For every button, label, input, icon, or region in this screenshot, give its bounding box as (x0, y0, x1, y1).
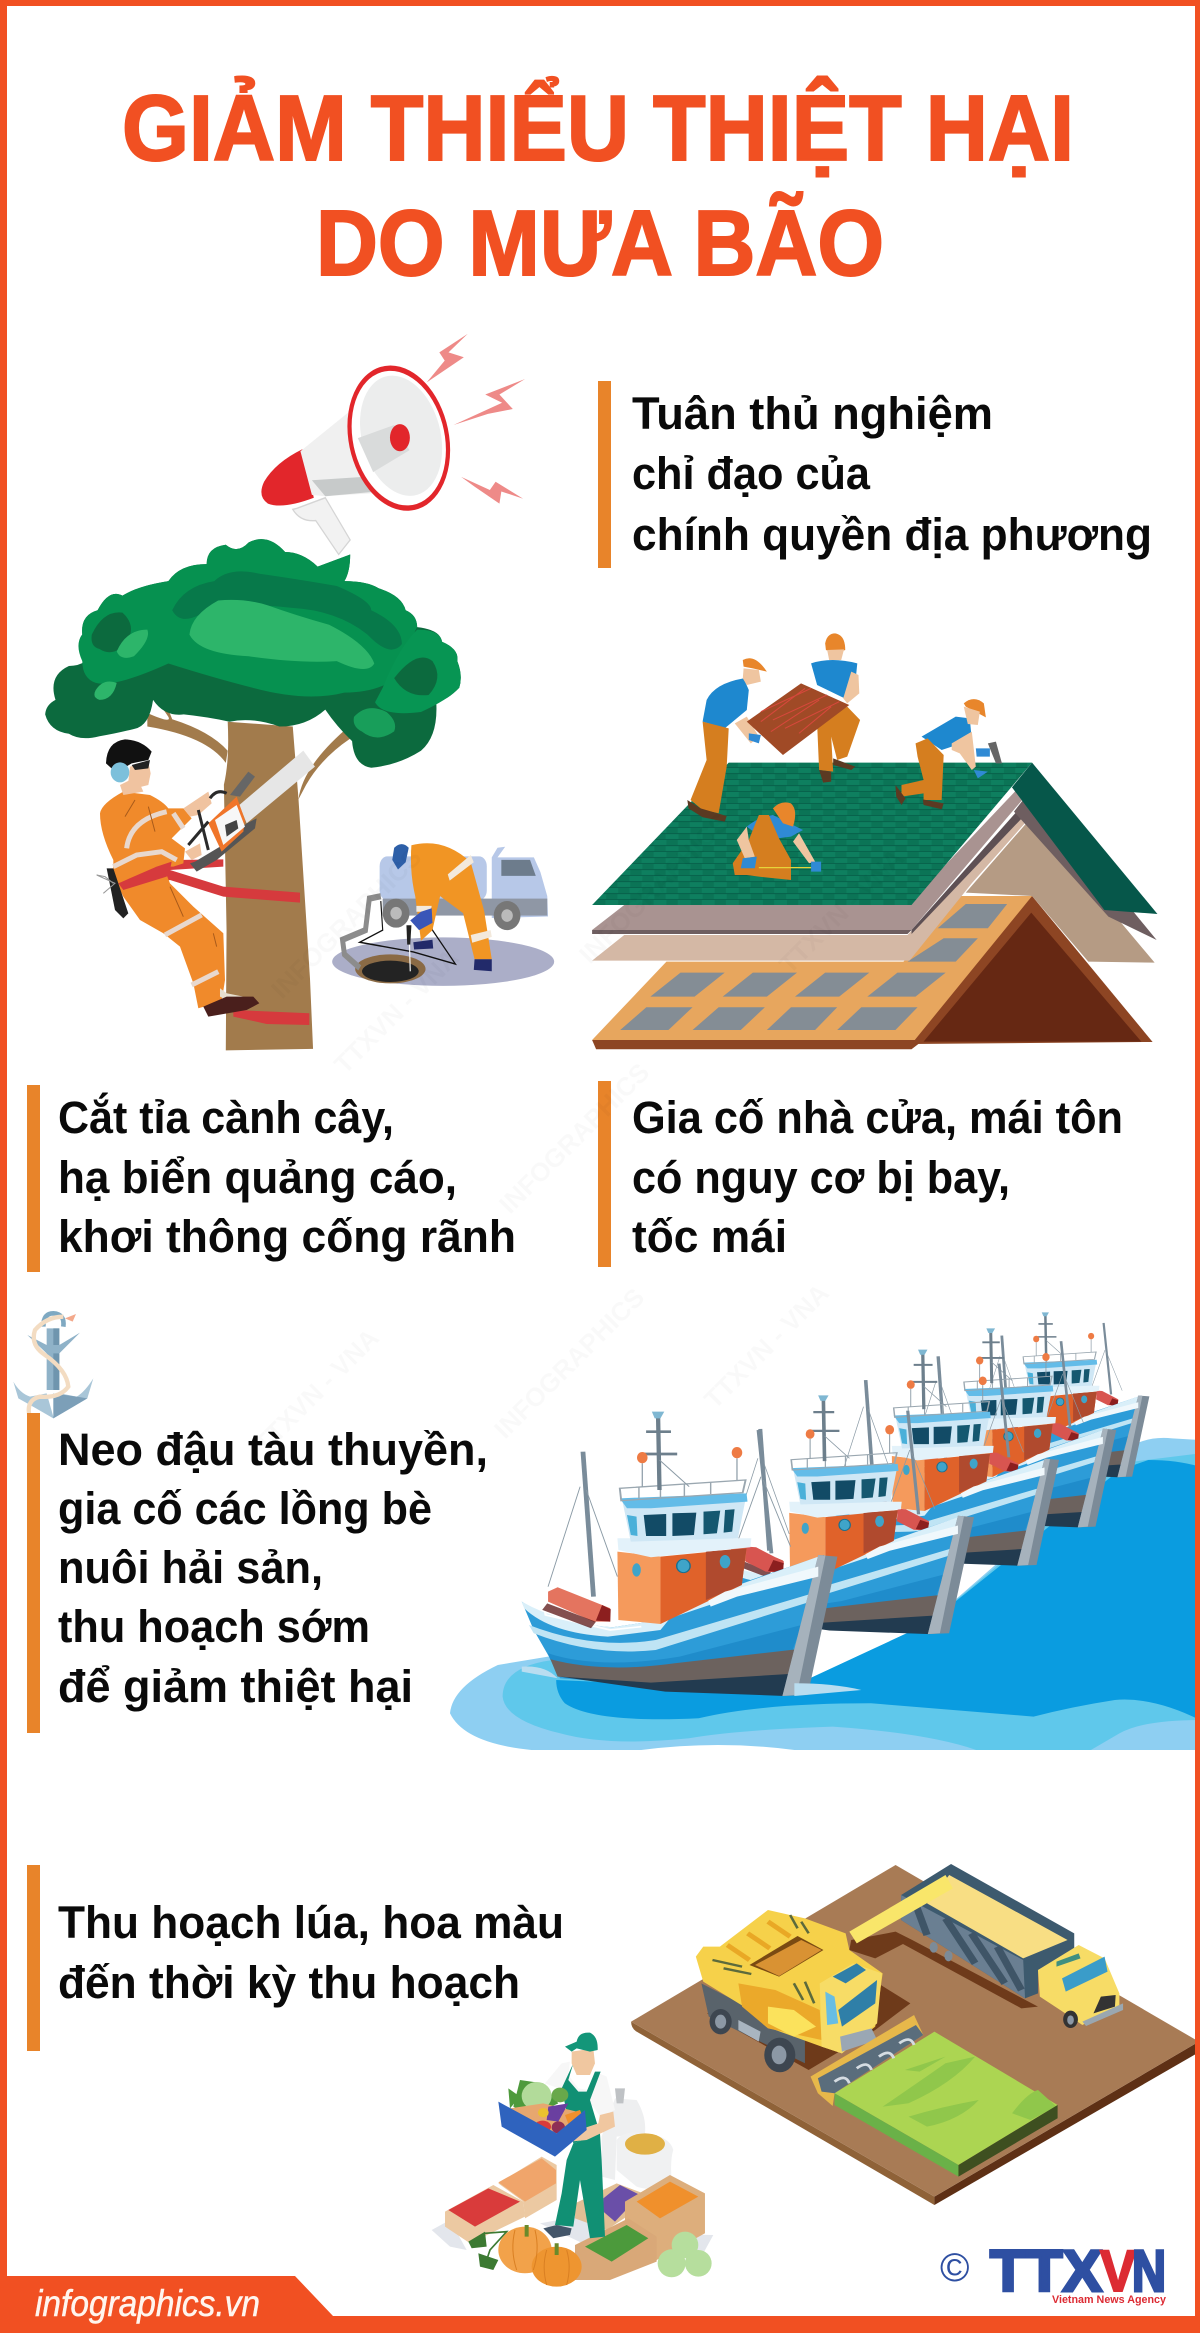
ground plot (631, 2022, 934, 2205)
ground shadow (432, 2217, 713, 2253)
ground shadows (707, 1932, 1038, 2070)
tree foliage (45, 539, 461, 768)
illustration: tree (45, 539, 461, 1050)
text block 4: thu hoạch sớm (58, 1601, 370, 1652)
text block 4: để giảm thiệt hại (58, 1661, 413, 1712)
text block 1: chính quyền địa phương (632, 509, 1152, 560)
accent bar (27, 1413, 40, 1733)
safety strap (118, 859, 309, 1025)
text block 3: có nguy cơ bị bay, (632, 1152, 1010, 1203)
roof tile panel (747, 683, 849, 755)
worker holding tile (811, 633, 860, 783)
text block 1: Tuân thủ nghiệm (632, 388, 993, 439)
text block 4: Neo đậu tàu thuyền, (58, 1424, 488, 1475)
accent bar (27, 1085, 40, 1272)
text block 5: Thu hoạch lúa, hoa màu (58, 1897, 564, 1948)
icon: copyright: © (940, 2246, 969, 2290)
combine harvester (696, 1910, 883, 2072)
pumpkins (468, 2225, 582, 2287)
text block 2: Cắt tỉa cành cây, (58, 1092, 394, 1143)
text block 3: Gia cố nhà cửa, mái tôn (632, 1092, 1123, 1143)
roof underlayment (592, 815, 1032, 961)
text block 5 (27, 1865, 564, 2051)
worker standing left (687, 658, 767, 822)
grain truck (901, 1864, 1123, 2028)
sacks (602, 2098, 645, 2180)
text block 1 (598, 381, 1152, 568)
copyright and logo (940, 2239, 1167, 2306)
illustration: megaphone (261, 334, 525, 554)
title: GIẢM THIỂU THIỆT HẠI (122, 76, 1074, 180)
text block 3 (598, 1081, 1123, 1267)
boat 5 (966, 1312, 1149, 1477)
boat 2 (709, 1395, 974, 1634)
illustration: drain cleaning worker and truck (332, 843, 554, 986)
roof felt (592, 788, 1032, 930)
boat 3 (819, 1350, 1059, 1566)
accent bar (598, 1081, 611, 1267)
TTXVN logo: Vietnam News Agency (1052, 2294, 1167, 2306)
text block 1: chỉ đạo của (632, 448, 871, 499)
crates (445, 2185, 525, 2243)
illustration: worker with chainsaw (97, 739, 315, 1025)
title (122, 76, 1074, 295)
text block 2: khơi thông cống rãnh (58, 1211, 516, 1262)
icon: anchor (13, 1313, 93, 1418)
watermarks (248, 807, 910, 1459)
TTXVN logo (990, 2239, 1167, 2306)
TTXVN logo: V (1100, 2239, 1136, 2304)
text block 5: đến thời kỳ thu hoạch (58, 1957, 520, 2008)
illustration: farmer with produce (432, 2033, 713, 2287)
accent bar (27, 1865, 40, 2051)
text block 3: tốc mái (632, 1211, 787, 1262)
worker measuring (733, 802, 821, 880)
text block 4: nuôi hải sản, (58, 1542, 323, 1593)
TTXVN logo: TTX (990, 2239, 1102, 2304)
illustration: boats on water (450, 1312, 1200, 1750)
harvester header (810, 2015, 923, 2106)
farmer (498, 2033, 615, 2238)
text block 4: gia cố các lồng bè (58, 1483, 432, 1534)
cabbages (658, 2232, 712, 2277)
text block 4 (27, 1413, 488, 1733)
green crop field (835, 2032, 1058, 2165)
grain spout (849, 1875, 953, 1943)
roof green tiles (592, 763, 1032, 905)
title: DO MƯA BÃO (316, 191, 884, 295)
produce basket (508, 2080, 558, 2117)
worker kneeling with tool (895, 699, 1002, 809)
accent bar (598, 381, 611, 568)
water (450, 1438, 1200, 1750)
text block 2: hạ biển quảng cáo, (58, 1152, 457, 1203)
tree trunk and branches (147, 700, 350, 1050)
TTXVN logo: N (1132, 2239, 1166, 2304)
boat 1 (522, 1412, 837, 1696)
roof timber layer (592, 896, 1032, 1041)
text block 2 (27, 1085, 516, 1272)
footer: source: infographics.vn (35, 2283, 260, 2324)
chainsaw (239, 751, 315, 823)
illustration: combine harvester and truck (631, 1864, 1200, 2205)
illustration: roof repair (592, 633, 1157, 1049)
boat 4 (895, 1328, 1116, 1527)
